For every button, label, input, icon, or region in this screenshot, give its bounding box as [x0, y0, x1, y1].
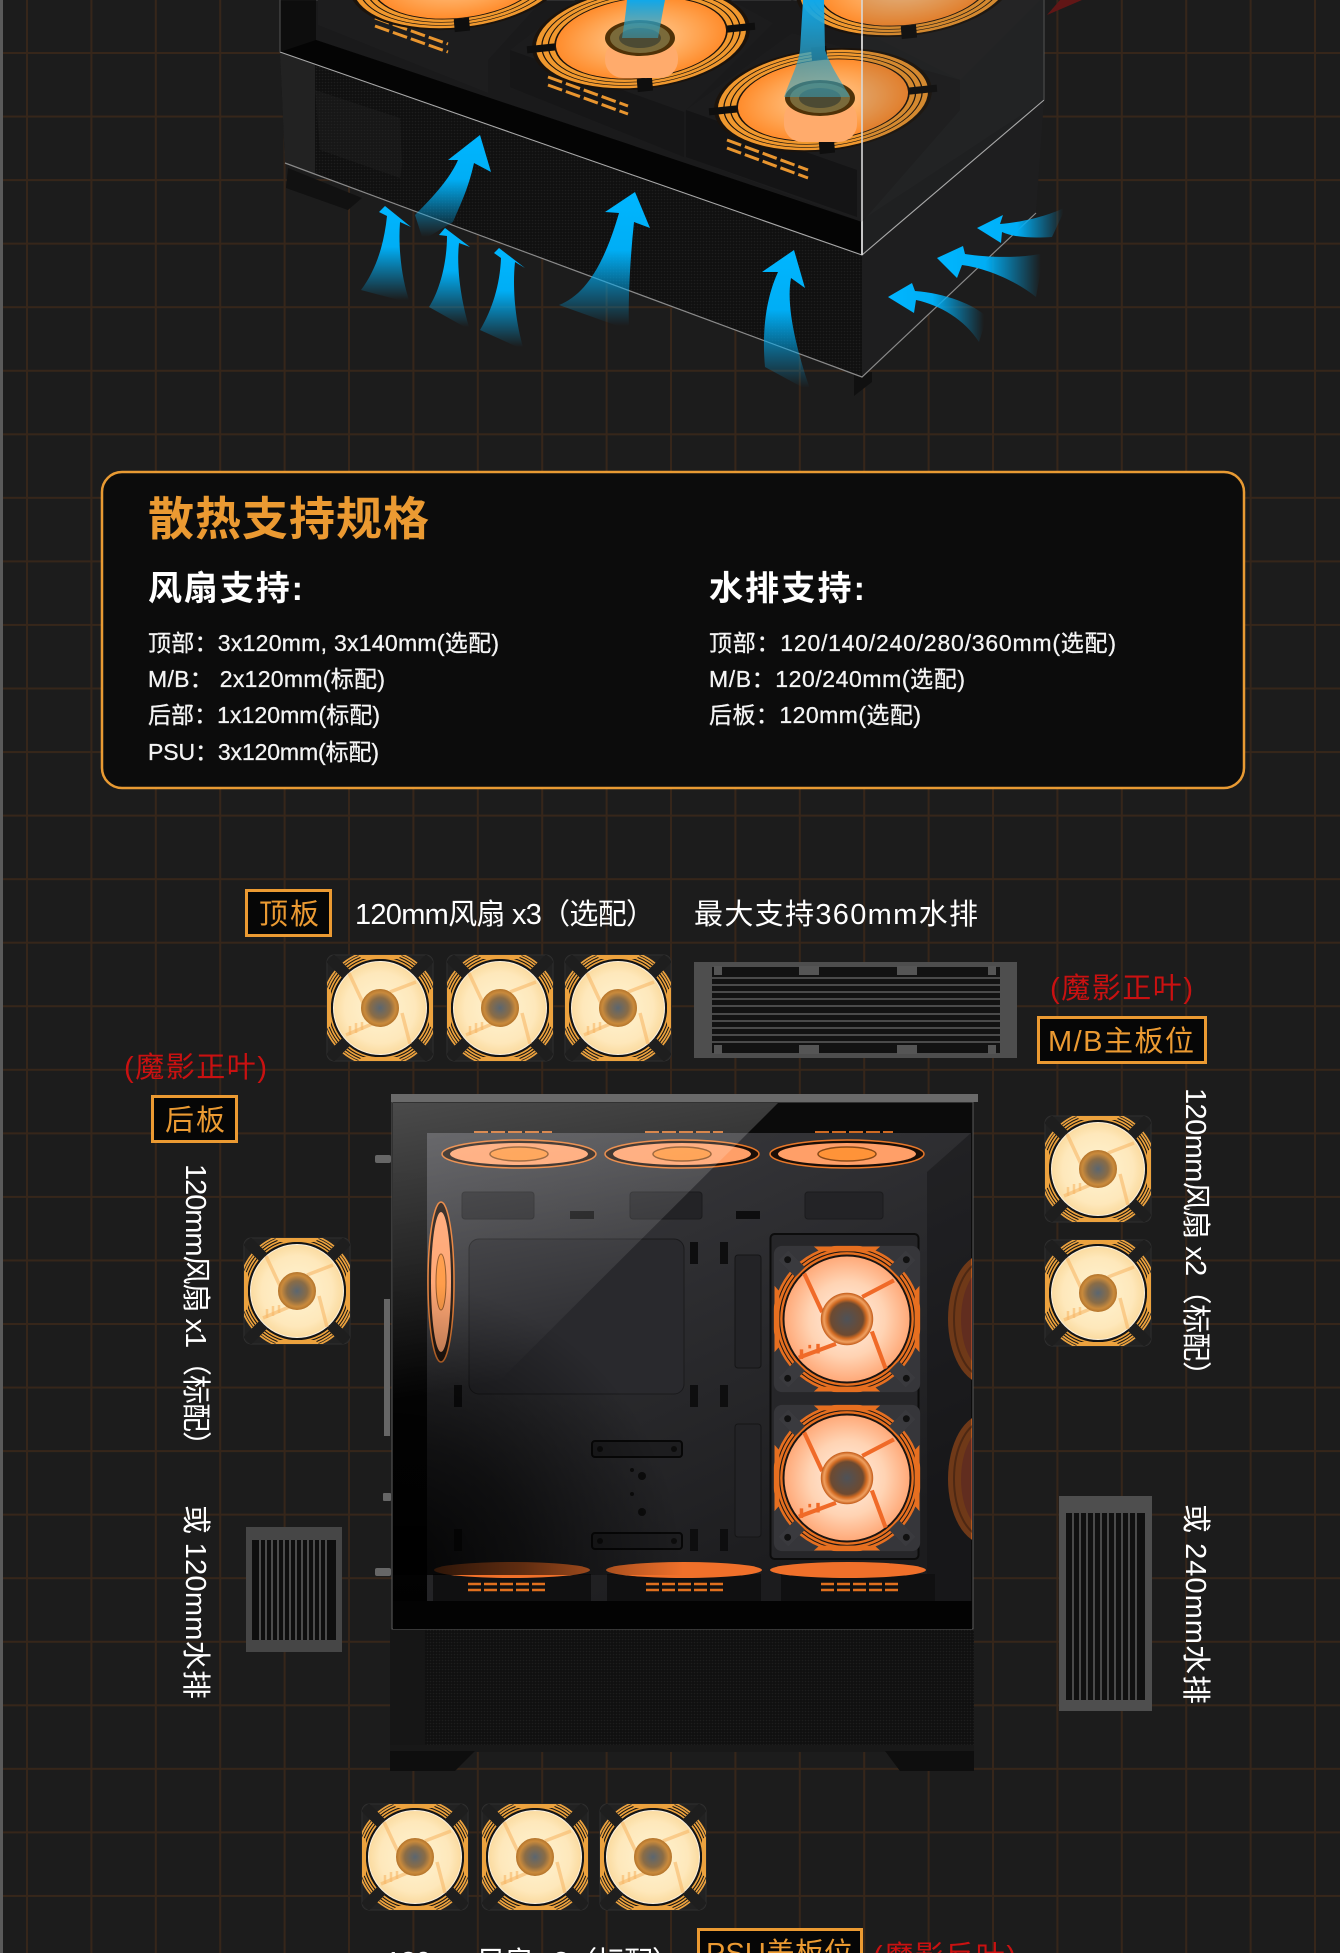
- floor band: [393, 1601, 972, 1629]
- airflow arrow 1: [415, 135, 491, 240]
- caption: motherboard radiator (rotated): 或 240mm水排: [1179, 1504, 1212, 1704]
- fan spec line top: 顶部：3x120mm, 3x140mm(选配): [148, 630, 499, 656]
- note: left magic blade: (魔影正叶): [124, 1051, 267, 1084]
- icon: PSU fan 1: [357, 1799, 473, 1915]
- label: motherboard position: [1038, 1018, 1206, 1062]
- case lower chamber: [390, 1629, 974, 1751]
- icon: 240mm radiator: [1059, 1496, 1152, 1711]
- right lower face: [862, 100, 1044, 377]
- small mounting slots: [454, 1211, 760, 1551]
- left edge strip: [0, 0, 3, 1953]
- right side fans behind glass: [948, 1258, 972, 1540]
- fan spec line PSU: PSU：3x120mm(标配): [148, 739, 379, 765]
- label: rear panel: 后板: [165, 1104, 225, 1137]
- panel title: 散热支持规格: [148, 493, 429, 545]
- icon: rear fan: [239, 1233, 355, 1349]
- icon: 360mm radiator: [694, 962, 1017, 1058]
- airflow arrow 6: [762, 250, 811, 392]
- fan box 2: [527, 0, 755, 116]
- top case fan 2: [605, 1140, 759, 1168]
- airflow arrow right 3: [888, 283, 987, 342]
- back plate: [427, 1133, 971, 1601]
- note: top right magic blade: (魔影正叶): [1050, 972, 1193, 1005]
- caption: rear radiator (rotated): 或 120mm水排: [179, 1505, 212, 1699]
- left column shadow: [393, 1150, 427, 1601]
- case handle and thumb screws: [375, 1155, 391, 1576]
- glass back and upper box: [280, 0, 862, 255]
- radiator spec line top: 顶部：120/140/240/280/360mm(选配): [709, 630, 1116, 656]
- left lower face with mesh: [280, 52, 862, 377]
- caption: top radiator: 最大支持360mm水排: [694, 898, 978, 931]
- blue air column fan 3: [784, 0, 850, 97]
- standoffs: [597, 1446, 677, 1544]
- airflow arrow right 2: [937, 246, 1044, 297]
- icon: 120mm radiator: [246, 1527, 342, 1652]
- fan box 4: [791, 0, 1002, 39]
- panel: cooling support specs: [102, 472, 1244, 788]
- icon: motherboard fan 2: [1040, 1235, 1156, 1351]
- bottom case fan 3: [770, 1562, 935, 1601]
- fan box 3: [709, 46, 938, 222]
- caption: top fans: 120mm风扇 x3（选配）: [355, 898, 655, 931]
- blue air column fan 2: [622, 0, 665, 38]
- glass reflection: [393, 1103, 778, 1440]
- fan support column: [148, 570, 499, 765]
- radiator support column: [709, 570, 1116, 728]
- glass enclosure: [392, 1102, 973, 1629]
- interior floor band: [280, 0, 862, 255]
- icon: top fan 3: [560, 950, 676, 1066]
- airflow arrow 3: [429, 228, 470, 330]
- label: top panel: [246, 890, 330, 936]
- icon: top fan 2: [442, 950, 558, 1066]
- case left foot: [286, 168, 362, 210]
- fan spec line rear: 后部：1x120mm(标配): [148, 702, 380, 728]
- caption: rear fan (rotated): 120mm风扇 x1（标配）: [179, 1164, 212, 1460]
- left case fan: [428, 1202, 454, 1362]
- motherboard cutout: [469, 1239, 684, 1394]
- right side panel: [927, 1133, 971, 1601]
- vertical slots: [735, 1255, 761, 1537]
- glass tint over right side: [862, 0, 1044, 142]
- airflow arrow 4: [480, 248, 525, 350]
- label: rear panel: [152, 1096, 236, 1142]
- airflow arrow 2: [361, 206, 411, 303]
- top case fan 3: [770, 1140, 924, 1168]
- airflow arrow right 1: [977, 207, 1066, 243]
- icon: top fan 1: [322, 950, 438, 1066]
- red corner accent: [1047, 0, 1082, 15]
- product image: side view of case: [375, 1094, 1022, 1771]
- radiator support heading: 水排支持:: [709, 570, 865, 608]
- fan spec line MB: M/B： 2x120mm(标配): [148, 666, 385, 692]
- top bar: [391, 1094, 978, 1102]
- radiator spec line MB: M/B：120/240mm(选配): [709, 666, 965, 692]
- motherboard fan 2: [774, 1405, 920, 1551]
- interior fans: [304, 0, 1059, 222]
- radiator spec line rear: 后板：120mm(选配): [709, 702, 921, 728]
- lower-left glass shadow: [393, 1275, 693, 1575]
- case base and feet: [390, 1745, 974, 1771]
- icon: motherboard fan 1: [1040, 1111, 1156, 1227]
- bottom case fan 1: [433, 1562, 591, 1601]
- caption: motherboard fans (rotated): 120mm风扇 x2（标配）: [1179, 1088, 1212, 1390]
- fan bracket: [770, 1234, 918, 1559]
- label: top panel: 顶板: [259, 898, 319, 931]
- case edge lines: [280, 0, 1044, 377]
- case right foot: [854, 372, 872, 396]
- motherboard fan 1: [774, 1246, 920, 1392]
- product image: isometric case with airflow: [280, 0, 1082, 396]
- icon: PSU fan 3: [595, 1799, 711, 1915]
- label: PSU cover position: [698, 1930, 862, 1953]
- right glass side: [862, 0, 1044, 255]
- fan box 1: [318, 0, 547, 54]
- top case fan 1: [442, 1140, 596, 1168]
- top fan dashes: [474, 1131, 893, 1133]
- label: motherboard position: M/B主板位: [1048, 1025, 1194, 1058]
- icon: PSU fan 2: [477, 1799, 593, 1915]
- fan support heading: 风扇支持:: [148, 570, 303, 608]
- cable grommet bars: [592, 1441, 682, 1549]
- bottom case fan 2: [606, 1562, 762, 1601]
- cable holes: [462, 1192, 883, 1219]
- airflow arrow 5: [559, 192, 650, 330]
